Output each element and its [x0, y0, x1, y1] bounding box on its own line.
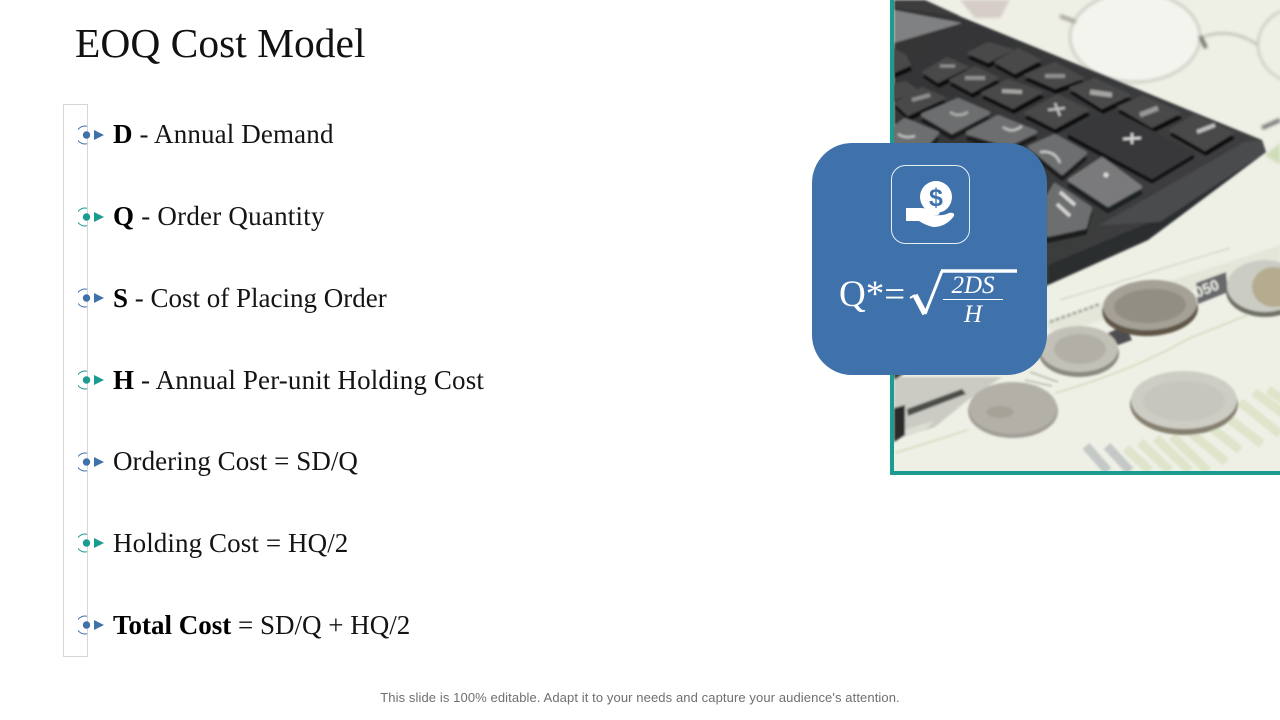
bullet: holding cost — [78, 534, 104, 552]
formula: fraction bar — [943, 299, 1003, 300]
formula panel — [812, 143, 1047, 375]
formula: radical — [910, 269, 1017, 316]
bullet: ordering cost — [78, 452, 104, 472]
item: H: H - Annual Per-unit Holding Cost — [113, 365, 484, 395]
keys — [895, 48, 1234, 155]
bullet: total cost — [78, 616, 104, 634]
lower paper — [894, 0, 1280, 471]
lower paper: 050 — [1192, 277, 1222, 302]
key glyphs — [898, 66, 1215, 216]
footer note: This slide is 100% editable. Adapt it to your needs and capture your audience's attention. — [380, 690, 900, 705]
list rail — [63, 104, 88, 657]
calculator body — [894, 0, 1266, 380]
icon: hand holding dollar coin — [891, 165, 970, 244]
formula: Q*: Q*= — [839, 274, 905, 315]
bullet: Q — [78, 208, 104, 226]
coins — [968, 384, 1058, 438]
item: D: D - Annual Demand — [113, 119, 334, 149]
item: S: S - Cost of Placing Order — [113, 283, 387, 313]
bullet: H — [78, 370, 104, 390]
item: Q: Q - Order Quantity — [113, 201, 325, 231]
title: EOQ Cost Model — [75, 20, 366, 66]
item: total cost: Total Cost = SD/Q + HQ/2 — [113, 610, 410, 640]
item: holding cost: Holding Cost = HQ/2 — [113, 528, 348, 558]
formula: denominator: H — [964, 301, 982, 328]
formula: numerator: 2DS — [951, 272, 995, 299]
chart bars — [1126, 390, 1280, 471]
photo: calculator, coins and glasses — [890, 0, 1280, 475]
bullet: D — [78, 126, 104, 144]
bullet: S — [78, 288, 104, 308]
item: ordering cost: Ordering Cost = SD/Q — [113, 446, 358, 476]
icon: hand holding dollar coin: $ — [929, 184, 943, 212]
